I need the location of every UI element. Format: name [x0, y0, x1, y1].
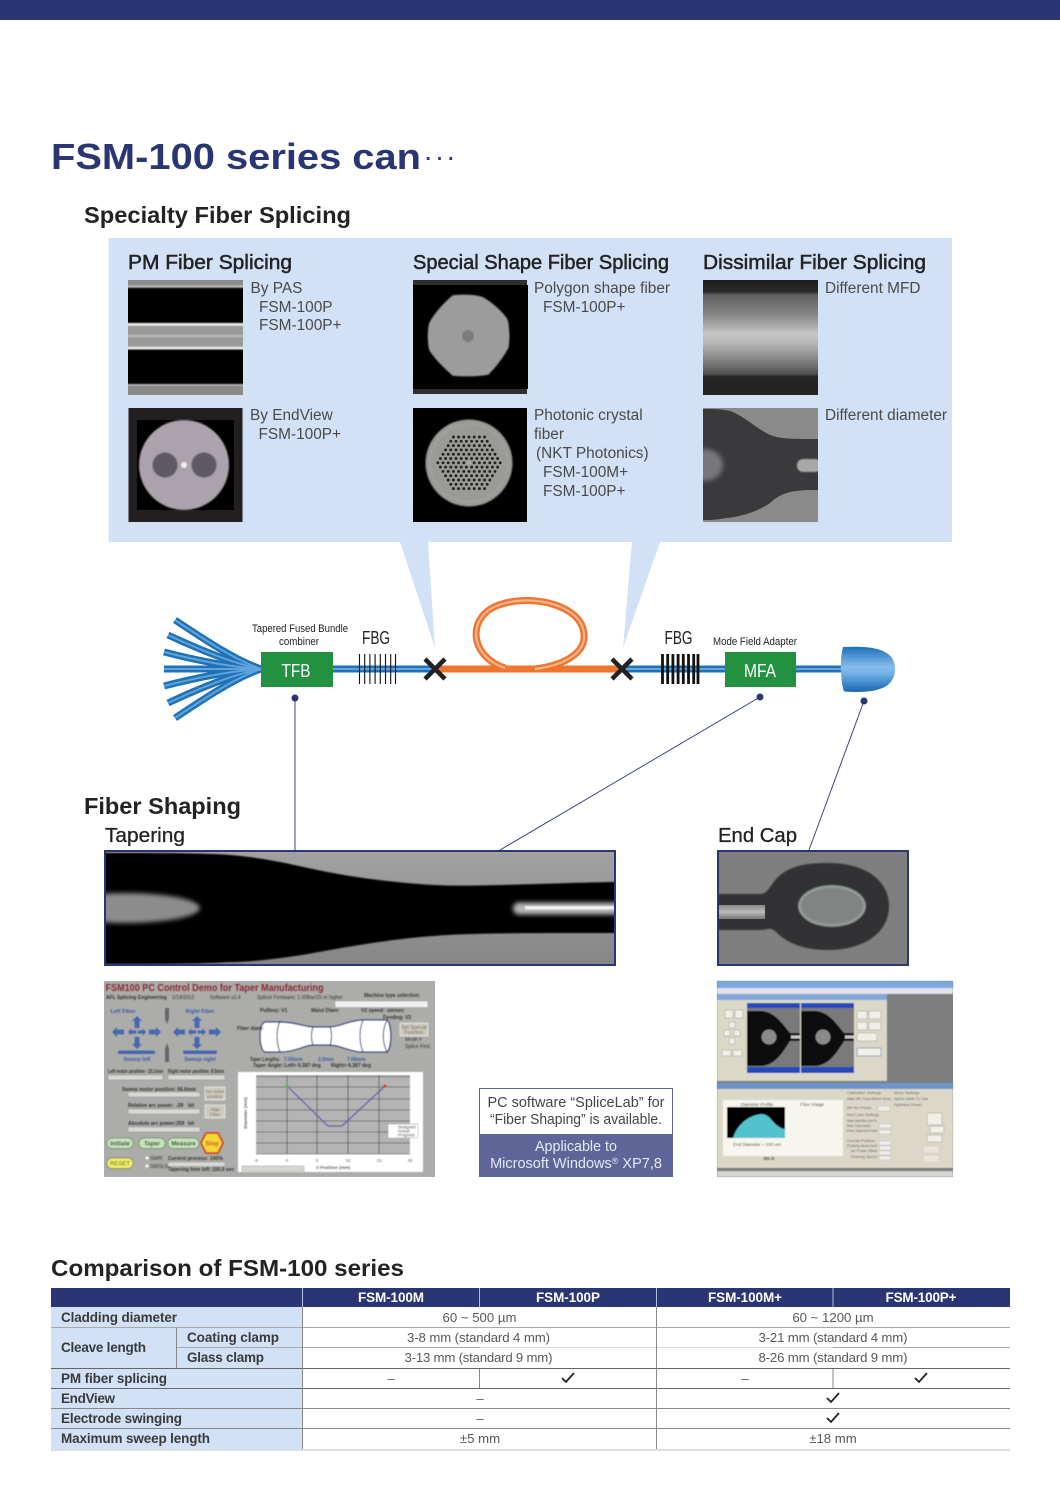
table rules	[51, 1307, 1010, 1450]
row labels: Coating clamp	[187, 1330, 279, 1345]
screenshot meta row	[106, 993, 421, 1001]
lower window: Ball Diameter	[847, 1123, 872, 1128]
taper profile drawing: Taper Lengths:	[250, 1057, 280, 1063]
app menu bar	[717, 988, 953, 994]
progress block: 150.0 sec	[212, 1167, 234, 1173]
taper profile drawing: Fiber diam:	[237, 1026, 264, 1032]
taper profile drawing: Waist Diam:	[311, 1008, 340, 1014]
text: by PAS	[250, 280, 342, 334]
motor and arc sliders: Sweep motor position: 56.6mm	[122, 1087, 196, 1093]
heading: special shape fiber splicing: Special Shape Fiber Splicing	[413, 251, 669, 274]
lower window: Pushing Speed	[851, 1154, 877, 1159]
lower window: Calibration Settings	[847, 1090, 881, 1095]
text: by EndView: FSM-100P+	[258, 426, 341, 443]
label: left FBG: FBG	[362, 628, 390, 648]
screenshot meta row: AFL Splicing Engineering	[106, 995, 167, 1001]
lower window: Overall Position	[847, 1138, 875, 1143]
comparison table	[51, 1288, 1010, 1450]
screenshot meta row: Software v2.4	[210, 995, 241, 1001]
photo: photonic crystal fiber	[413, 408, 527, 522]
control buttons: Initiate	[110, 1142, 130, 1148]
lower window: Fiber Diameter/Field	[847, 1128, 877, 1133]
lower window: End Lock Settings	[847, 1112, 879, 1117]
motor and arc sliders: -39	[176, 1103, 183, 1109]
end cap	[841, 647, 895, 692]
fiber motion controls	[110, 1008, 221, 1063]
arc power chart: Z-Position (mm)	[316, 1165, 351, 1170]
arc power chart: Diameter (mm)	[243, 1097, 248, 1129]
row labels: Cleave length	[61, 1340, 146, 1355]
arc power chart	[238, 1072, 423, 1172]
photo: polygon shape fiber	[413, 280, 528, 394]
taper profile drawing: Pullboy: V1	[260, 1008, 287, 1014]
taper profile drawing: Right= 6.387 deg	[331, 1063, 371, 1069]
row labels	[61, 1310, 279, 1446]
text: by PAS: FSM-100P+	[259, 317, 342, 334]
text: polygon shape fiber: Polygon shape fiber	[534, 280, 670, 297]
lower window: Fiber Image	[800, 1102, 824, 1107]
label: tapered fused bundle combiner: combiner	[279, 636, 319, 648]
subheading: tapering: Tapering	[105, 824, 185, 847]
lower window	[717, 1083, 953, 1168]
lower window: Optimize Power	[894, 1102, 923, 1107]
table values: 3-13 mm (standard 9 mm)	[404, 1350, 552, 1365]
table values: ±18 mm	[809, 1431, 857, 1446]
heading: fiber shaping: Fiber Shaping	[84, 793, 241, 819]
app title bar	[717, 981, 953, 988]
text: photonic crystal fiber: Photonic crystal	[534, 407, 643, 424]
text: polygon shape fiber: FSM-100P+	[543, 299, 626, 316]
progress block: Current process:	[168, 1156, 209, 1162]
taper profile drawing: Feeding: V2	[383, 1015, 412, 1021]
panel: specialty fiber splicing	[108, 238, 952, 648]
blue fiber segments	[333, 666, 846, 672]
arc power chart: 15	[376, 1158, 382, 1163]
upper window	[717, 994, 887, 1081]
text: photonic crystal fiber: FSM-100P+	[543, 483, 626, 500]
table values: –	[476, 1391, 484, 1406]
note: PC software: “Fiber Shaping” is available.	[490, 1112, 662, 1128]
taper profile drawing: um/sec	[387, 1008, 404, 1014]
top header bar	[0, 0, 1060, 20]
progress block: SM/R	[150, 1156, 163, 1162]
note: PC software: XP7,8	[618, 1156, 662, 1172]
lower window: Make Ball After End Fir	[847, 1118, 877, 1123]
table values: 3-21 mm (standard 4 mm)	[758, 1330, 908, 1345]
callout pointer: left splice	[400, 542, 435, 648]
motor and arc sliders: Relative arc power:	[128, 1103, 174, 1109]
taper profile drawing: Function	[404, 1030, 424, 1036]
TFB block	[261, 652, 333, 687]
screenshot title: FSM100 PC Control Demo for Taper Manufacturing	[106, 982, 324, 994]
motor and arc sliders: Absolute arc power:	[128, 1121, 176, 1127]
row labels: Electrode swinging	[61, 1411, 182, 1426]
table values: 60 ~ 500 µm	[443, 1310, 516, 1325]
machine type dropdown	[335, 1001, 428, 1008]
motor and arc sliders: bit	[188, 1103, 194, 1109]
row labels: EndView	[61, 1391, 115, 1406]
table header row: FSM-100P+	[886, 1290, 957, 1305]
text: by EndView	[250, 407, 341, 443]
lower window: Diameter Profile	[741, 1102, 774, 1107]
lower window: Splice Mark To Use	[894, 1096, 929, 1101]
heading: comparison: Comparison of FSM-100 series	[51, 1255, 404, 1281]
taper profile drawing: 2.0mm	[318, 1057, 334, 1063]
control buttons: Measure	[171, 1142, 196, 1148]
lower window: Make MF Focus Before Move	[847, 1096, 892, 1101]
table values: –	[741, 1371, 749, 1386]
row labels: Cladding diameter	[61, 1310, 178, 1325]
MFA block: MFA	[744, 661, 776, 681]
row labels: Glass clamp	[187, 1350, 264, 1365]
fiber bundle	[164, 620, 261, 718]
note: PC software: Applicable to	[535, 1139, 617, 1155]
fiber motion controls: Sweep left	[123, 1057, 151, 1063]
photo: PM fiber by PAS	[128, 280, 243, 395]
row labels: Maximum sweep length	[61, 1431, 210, 1446]
arc power chart: Actual	[398, 1128, 410, 1134]
left FBG grating	[360, 654, 396, 684]
fiber motion controls: Left Fiber	[110, 1009, 136, 1015]
text: photonic crystal fiber	[534, 407, 649, 500]
splice mark left	[425, 659, 445, 679]
screenshot: SpliceLab software	[717, 981, 953, 1177]
text: polygon shape fiber	[534, 280, 670, 316]
control buttons	[107, 1133, 223, 1168]
photo: different diameter	[703, 408, 818, 522]
screenshot meta row: Splicer Firmware: 1.00Bar/25 or higher	[257, 995, 343, 1001]
table header row: FSM-100P	[536, 1290, 600, 1305]
note: PC software: Microsoft Windows	[490, 1156, 612, 1172]
taper profile drawing: V2 speed:	[361, 1008, 385, 1014]
arc power chart: Designed	[398, 1124, 416, 1130]
heading: specialty fiber splicing: Specialty Fiber Splicing	[84, 202, 351, 228]
lower window: arc Power Offset	[851, 1148, 878, 1153]
right FBG grating	[662, 654, 698, 684]
progress block	[146, 1156, 234, 1173]
motor and arc sliders: position	[207, 1094, 223, 1099]
table header row: FSM-100M+	[708, 1290, 782, 1305]
progress block: Tapering time left:	[168, 1167, 211, 1173]
table values: 3-8 mm (standard 4 mm)	[407, 1330, 550, 1345]
arc power chart: 5	[316, 1158, 319, 1163]
orange fiber loop	[435, 601, 622, 669]
taper profile drawing: Set Special	[401, 1025, 427, 1031]
arc power chart: Progress	[398, 1132, 415, 1138]
TFB block: TFB	[282, 661, 310, 681]
arc power chart: 10	[345, 1158, 351, 1163]
text: photonic crystal fiber: fiber	[534, 426, 564, 443]
text: photonic crystal fiber: FSM-100M+	[543, 464, 628, 481]
table header row: FSM-100M	[358, 1290, 424, 1305]
text: photonic crystal fiber: (NKT Photonics)	[536, 445, 649, 462]
MFA block	[725, 652, 796, 687]
text: by PAS: FSM-100P	[259, 299, 333, 316]
motor and arc sliders: Fiber	[210, 1112, 221, 1117]
connector: end cap	[809, 698, 868, 850]
row labels: PM fiber splicing	[61, 1371, 167, 1386]
taper profile drawing: Mode #	[405, 1037, 422, 1043]
text: by EndView: By EndView	[250, 407, 334, 424]
heading: dissimilar fiber splicing: Dissimilar Fiber Splicing	[703, 251, 926, 274]
arc power chart: -5	[254, 1158, 258, 1163]
table values: ±5 mm	[460, 1431, 500, 1446]
control buttons: Stop	[205, 1142, 219, 1148]
arc power chart: 0	[286, 1158, 289, 1163]
photo: different MFD	[703, 280, 818, 395]
label: tapered fused bundle combiner	[252, 623, 348, 648]
fiber motion controls: Sweep right	[184, 1057, 216, 1063]
status bar	[717, 1171, 953, 1177]
progress block: SM/SLR	[150, 1164, 169, 1170]
fiber laser diagram	[164, 601, 895, 718]
label: right FBG: FBG	[664, 628, 692, 648]
title: FSM-100 series can	[51, 136, 421, 177]
row label column	[51, 1307, 302, 1449]
note: PC software	[479, 1088, 673, 1177]
text: different diameter: Different diameter	[825, 407, 947, 424]
control buttons: Taper	[144, 1142, 161, 1148]
taper profile drawing	[237, 1008, 430, 1069]
screenshot meta row: 1/19/2012	[172, 995, 194, 1001]
text: different MFD: Different MFD	[825, 280, 920, 297]
check marks	[562, 1373, 927, 1422]
lower window: Pushing Movement	[847, 1143, 878, 1148]
motor and arc sliders: Left motor position: -15.1mm	[108, 1069, 163, 1075]
lower window: MF for Preset	[847, 1105, 872, 1110]
heading: PM fiber splicing: PM Fiber Splicing	[128, 251, 292, 274]
splice mark right	[612, 659, 632, 679]
control buttons: RESET	[110, 1162, 130, 1168]
photo: PM fiber by EndView	[128, 408, 242, 522]
fiber motion controls: Right Fiber	[185, 1009, 215, 1015]
table values: 8-26 mm (standard 9 mm)	[758, 1350, 908, 1365]
lower window: 85LB	[763, 1156, 775, 1161]
table header row	[51, 1288, 1010, 1307]
table values	[387, 1310, 908, 1446]
taper profile drawing: Taper Angle: Left= 6.387 deg	[253, 1063, 321, 1069]
table values: 60 ~ 1200 µm	[792, 1310, 874, 1325]
callout pointer: right splice	[623, 542, 660, 648]
motor and arc sliders: Align	[210, 1107, 220, 1112]
table values: –	[476, 1411, 484, 1426]
screenshot: taper control software	[104, 981, 435, 1177]
photo: end cap	[712, 851, 908, 965]
motor and arc sliders	[108, 1069, 225, 1132]
motor and arc sliders: 259	[176, 1121, 185, 1127]
screenshot meta row: Machine type selection:	[364, 993, 421, 999]
motor and arc sliders: Set motor	[205, 1089, 225, 1094]
progress block: 100%	[210, 1156, 223, 1162]
photo: tapering	[50, 851, 628, 965]
motor and arc sliders: bit	[188, 1121, 194, 1127]
arc power chart: 20	[407, 1158, 413, 1163]
note: PC software: ®	[612, 1156, 619, 1166]
taper profile drawing: Splice First	[405, 1044, 430, 1050]
taper profile drawing: 7.00mm	[347, 1057, 366, 1063]
title: ···	[424, 141, 456, 172]
label: tapered fused bundle combiner: Tapered Fused Bundle	[252, 623, 348, 635]
table values: –	[387, 1371, 395, 1386]
label: mode field adapter: Mode Field Adapter	[713, 636, 797, 648]
subheading: end cap: End Cap	[718, 824, 797, 847]
text: by PAS: By PAS	[250, 280, 302, 297]
taper profile drawing: 7.00mm	[284, 1057, 303, 1063]
lower window: Move Settings	[894, 1090, 919, 1095]
connector: MFA to tapering	[500, 694, 764, 850]
connector: TFB to tapering	[292, 694, 298, 850]
lower window: End Diameter = 200 um	[733, 1142, 781, 1147]
motor and arc sliders: Right motor position: 8.5mm	[168, 1069, 224, 1075]
note: PC software: PC software “SpliceLab” for	[488, 1095, 665, 1111]
